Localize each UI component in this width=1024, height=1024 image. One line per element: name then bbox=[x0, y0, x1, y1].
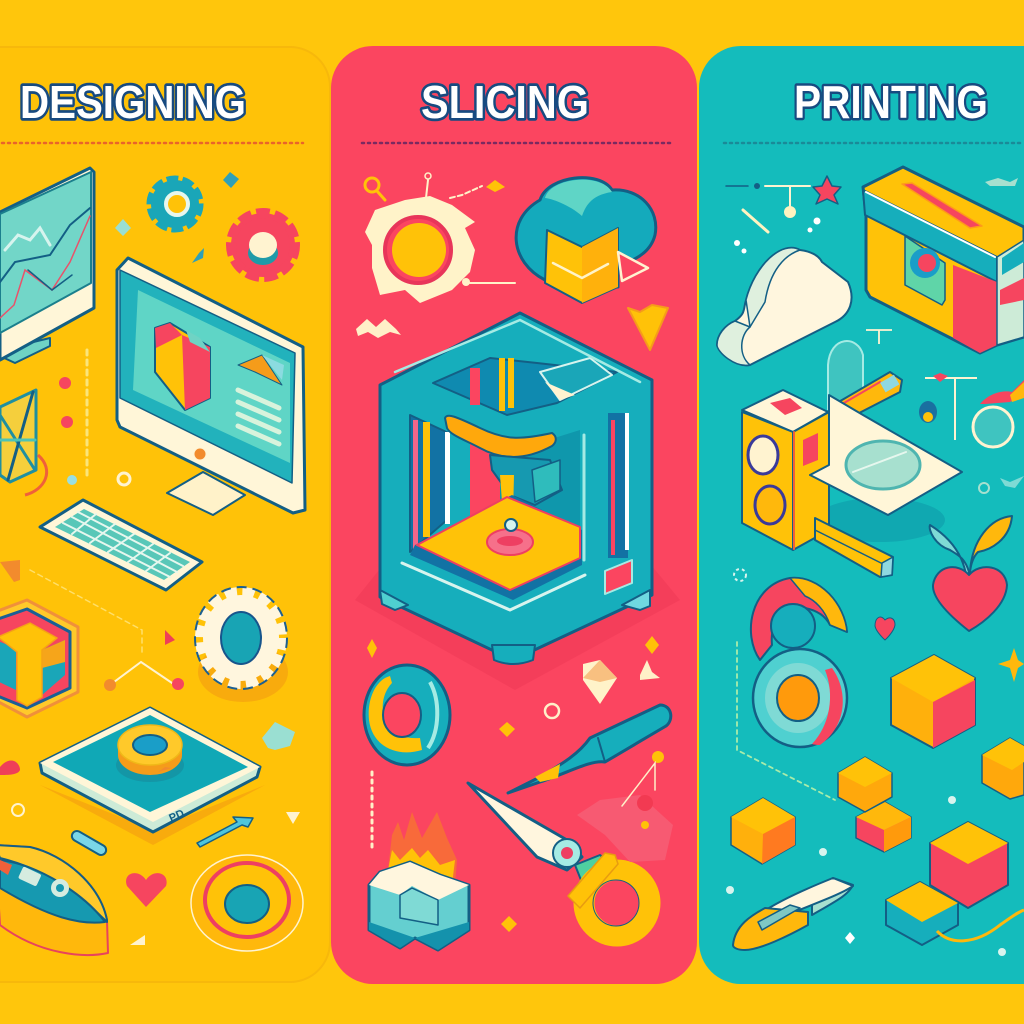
icon: cloud with box bbox=[516, 178, 656, 303]
icon: sunburst ring bbox=[365, 196, 475, 303]
icon: wireframe tower bbox=[0, 390, 47, 495]
shadow under build plate bbox=[40, 785, 265, 845]
icon: printer arm assembly bbox=[742, 341, 962, 577]
icon: teal gear bbox=[151, 180, 199, 228]
icon: heart bbox=[126, 873, 167, 907]
printer feet bbox=[380, 590, 650, 664]
icon: heart apple bbox=[930, 516, 1012, 631]
panel: slicing bbox=[331, 46, 697, 984]
icon: scissors blade bbox=[468, 783, 650, 936]
icon: magnifier bbox=[973, 380, 1024, 447]
printer bed bbox=[410, 495, 582, 600]
icon: 3D printer bbox=[380, 313, 652, 664]
icon: hex cube bbox=[0, 600, 78, 717]
icon: build plate: PD bbox=[167, 808, 186, 825]
icon: red gear bbox=[231, 213, 295, 277]
icon: yellow printer box bbox=[863, 167, 1024, 353]
shadow under white gear bbox=[198, 642, 288, 702]
small decorations: designing bbox=[0, 172, 300, 945]
icon: torus ring bbox=[364, 665, 450, 765]
icon: cutter tool bbox=[733, 878, 853, 950]
icon: figure-eight rings bbox=[751, 578, 847, 747]
icon: white gear bbox=[195, 587, 287, 689]
panel: designing bbox=[0, 47, 330, 982]
small decorations: printing bbox=[726, 176, 1024, 956]
heading: slicing: SLICING bbox=[421, 76, 589, 128]
heading: printing: PRINTING bbox=[794, 76, 988, 128]
icon: build plate bbox=[40, 708, 260, 832]
panel: printing bbox=[699, 46, 1024, 984]
icon: arrow bbox=[197, 817, 253, 847]
icon: rings target bbox=[191, 855, 303, 951]
icon: flaming block bbox=[369, 812, 469, 950]
printer top opening bbox=[395, 320, 640, 415]
icon: cube stack bbox=[731, 738, 1024, 945]
shadow under plate bbox=[815, 498, 945, 542]
icon: capsule tool bbox=[0, 845, 108, 955]
small decorations: slicing bbox=[356, 173, 673, 932]
icon: left monitor bbox=[0, 168, 94, 363]
shadow under printer bbox=[355, 400, 680, 690]
printer center opening bbox=[470, 413, 629, 575]
icon: yellow shield bbox=[628, 305, 668, 350]
icon: keyboard bbox=[40, 500, 202, 590]
printer left window bbox=[410, 415, 470, 552]
icon: pen tool bbox=[508, 705, 671, 793]
icon: pill bbox=[70, 829, 108, 857]
icon: white cloud bbox=[717, 248, 852, 365]
heading: designing: DESIGNING bbox=[20, 76, 246, 128]
icon: large cube bbox=[891, 655, 975, 748]
icon: large monitor bbox=[117, 258, 305, 515]
